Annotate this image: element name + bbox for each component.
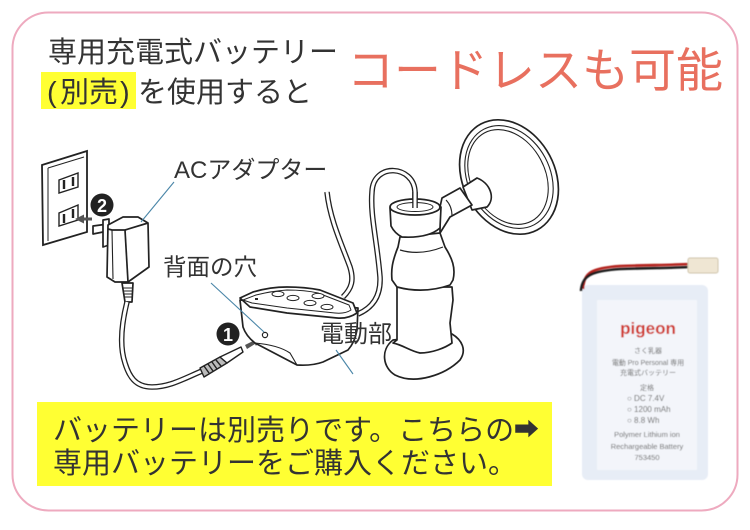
- photo: replacement battery: [581, 258, 718, 480]
- icon: DC plug: [200, 347, 243, 377]
- photo: replacement battery: Polymer Lithium ion: [614, 430, 680, 439]
- highlight: sold separately: 別売: [60, 76, 118, 109]
- label: motor unit: 電動部: [320, 321, 392, 348]
- tube entering bottle cap: [412, 192, 418, 208]
- photo: replacement battery: ○ 1200 mAh: [627, 405, 671, 414]
- highlight: sold separately: ): [120, 77, 130, 109]
- heading: battery usage line 2: を使用すると: [138, 76, 312, 109]
- photo: replacement battery: ○ 8.8 Wh: [627, 416, 659, 425]
- highlight: sold separately: [41, 72, 136, 109]
- title: cordless possible: コードレスも可能: [347, 44, 723, 97]
- icon: wall outlet: [42, 151, 87, 245]
- photo: replacement battery: Rechargeable Battery: [611, 442, 684, 451]
- arrow: plug into outlet: [75, 214, 92, 224]
- label: back hole: 背面の穴: [163, 254, 257, 280]
- icon: AC adapter: [93, 217, 149, 302]
- heading: battery usage line 1: 専用充電式バッテリー: [48, 36, 338, 69]
- photo: replacement battery: 充電式バッテリー: [620, 368, 676, 377]
- icon: pump bottle: [385, 199, 463, 379]
- callout: battery sold separately: [37, 402, 552, 486]
- photo: replacement battery: さく乳器: [634, 346, 662, 355]
- cable: adapter to plug: [122, 302, 202, 387]
- leader lines: [141, 182, 353, 374]
- icon: step 2 badge: 2: [97, 196, 107, 216]
- label: AC adapter: ACアダプター: [174, 157, 327, 184]
- icon: pump motor unit: [240, 287, 358, 365]
- photo: replacement battery: ○ DC 7.4V: [627, 394, 665, 403]
- photo: replacement battery: 753450: [634, 453, 660, 462]
- icon: step 2 badge: [90, 194, 114, 216]
- icon: step 1 badge: 1: [223, 325, 233, 345]
- callout: battery sold separately: バッテリーは別売りです。こちらの: [53, 414, 514, 447]
- icon: pump tubes: [327, 171, 415, 314]
- icon: breast shield: [440, 102, 578, 252]
- highlight: sold separately: (: [47, 77, 57, 109]
- arrow: plug into back hole: [245, 338, 261, 349]
- photo: replacement battery: 定格: [640, 383, 654, 392]
- callout: battery sold separately: 専用バッテリーをご購入ください。: [53, 447, 517, 480]
- photo: replacement battery: 電動 Pro Personal 専用: [612, 358, 684, 367]
- icon: step 1 badge: [216, 322, 240, 346]
- photo: replacement battery: pigeon: [620, 319, 676, 338]
- callout: battery sold separately: ➡: [514, 416, 539, 444]
